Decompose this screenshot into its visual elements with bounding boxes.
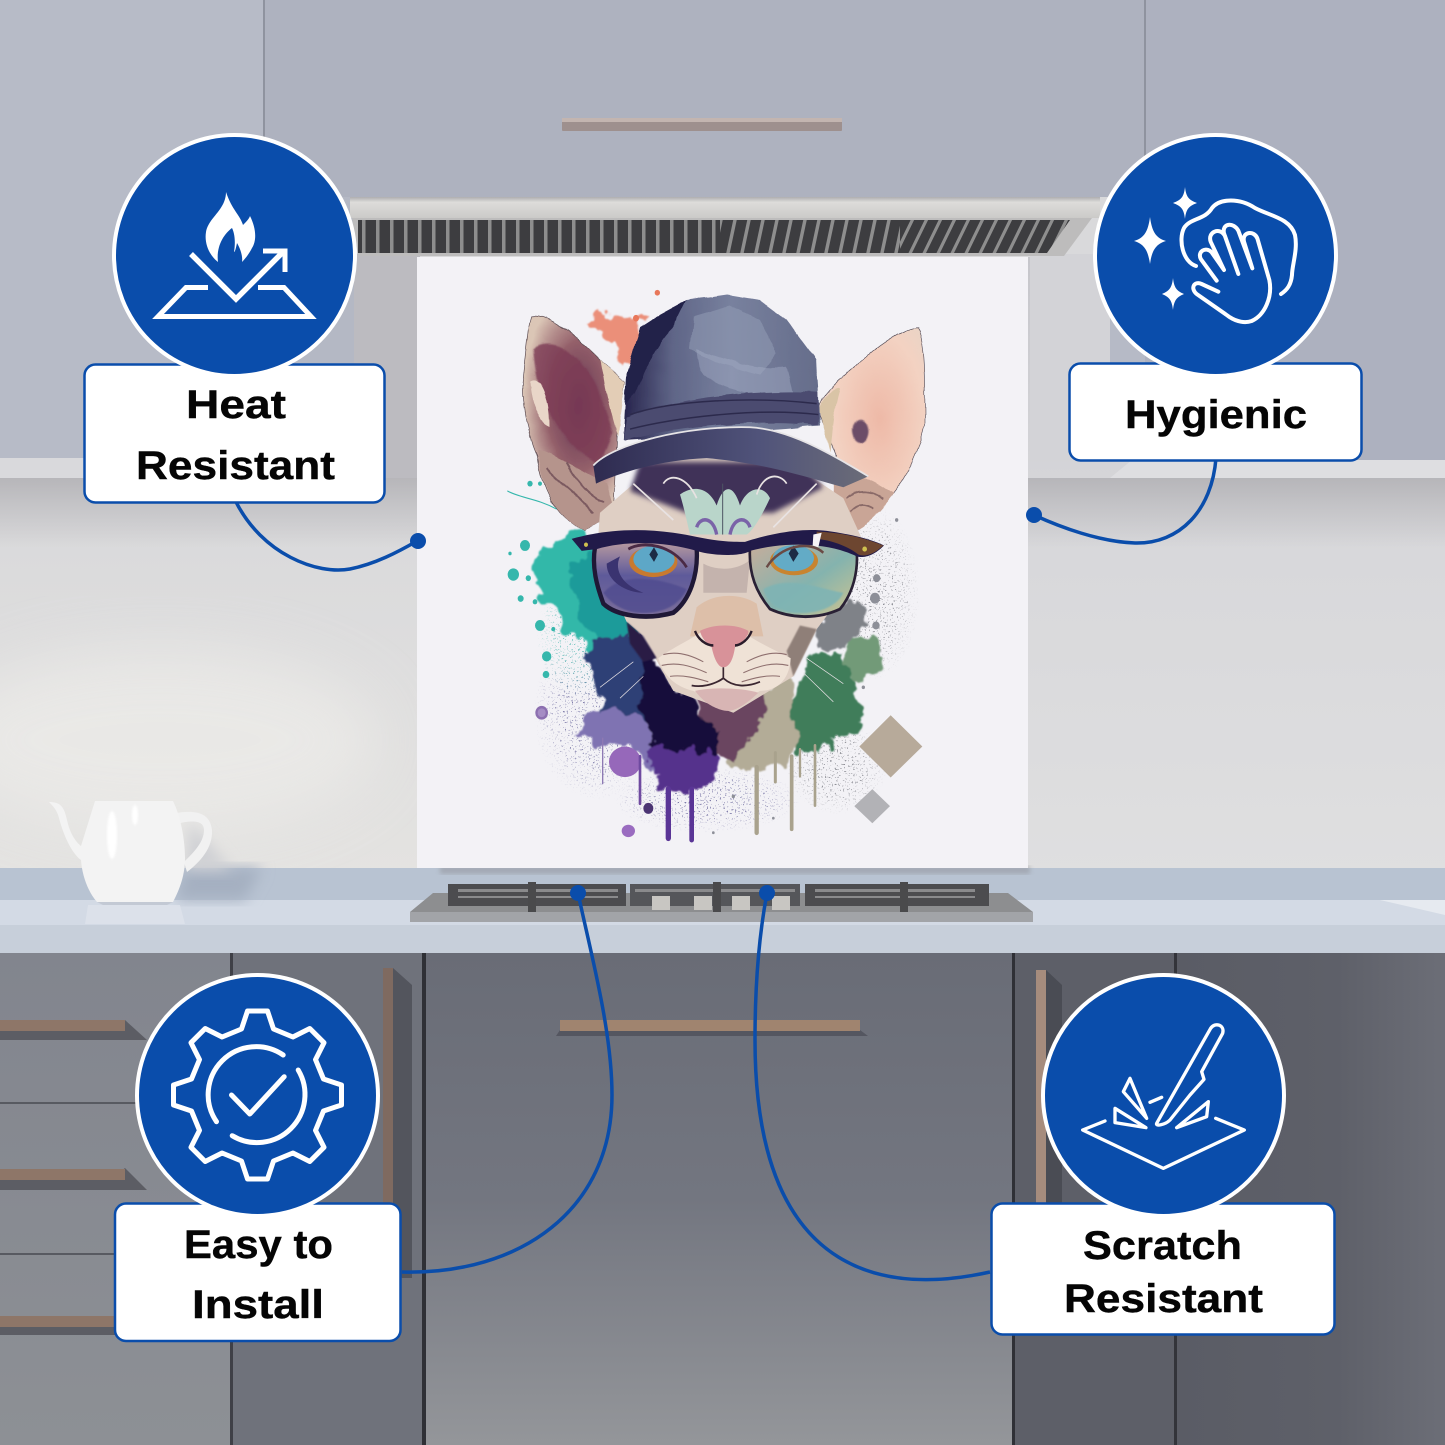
label text: Easy to [184,1223,333,1267]
hat [593,295,868,487]
connector: scratch resistant [755,885,990,1280]
gas hob [410,882,1033,922]
icon badge [114,135,355,376]
callout: easy to install [115,975,400,1341]
ears [522,316,925,531]
label text: Hygienic [1125,393,1307,437]
icon: flame over surface with arrow [158,192,311,316]
icon: knife scratching a surface [1083,1025,1244,1168]
label text: Scratch [1083,1224,1242,1268]
callout: heat resistant [84,135,384,502]
glasses [572,530,884,617]
connector: heat resistant [235,500,426,570]
callout: heat resistant: Resistant [136,444,335,488]
label box [992,1204,1334,1334]
icon badge [1095,135,1336,376]
label box [1070,364,1362,460]
artwork: sphynx cat in hat and glasses [507,290,925,840]
connector: easy to install [402,885,612,1272]
icon badge [1043,975,1284,1216]
face [597,458,863,713]
muzzle and nose [600,625,843,711]
lower cabinet handles [0,968,1062,1335]
white teapot [49,801,262,924]
label box [84,364,384,502]
connector: hygienic [1026,458,1216,543]
label box [115,1204,400,1341]
callout: easy to install: Install [192,1283,324,1327]
callout: scratch resistant [992,975,1334,1334]
callout: hygienic [1070,135,1362,460]
icon: hand wiping with sparkles [1134,187,1296,322]
paint spray [533,505,920,833]
panel: printed glass splashback [417,257,1030,874]
diamonds [854,715,922,823]
watercolour splashes [532,312,883,795]
label text: Heat [186,383,286,427]
paint spatter and drips [507,290,898,840]
icon: gear with check [174,1011,342,1179]
upper cabinet handle [562,118,842,131]
callout: scratch resistant: Resistant [1064,1277,1263,1321]
icon badge [137,975,378,1216]
